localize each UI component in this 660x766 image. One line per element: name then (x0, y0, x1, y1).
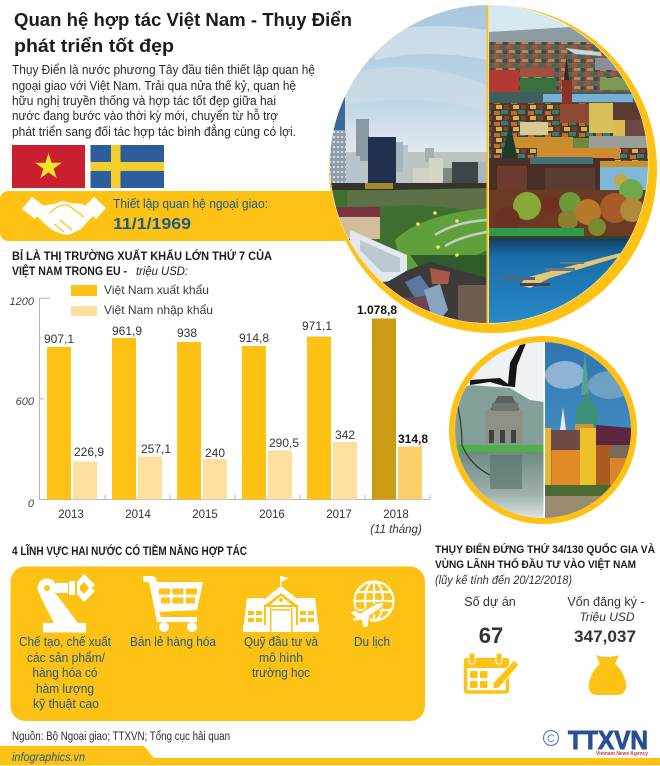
photo circle: Hanoi and Stockholm old town (449, 336, 637, 524)
bar values: 240 (205, 446, 225, 460)
sector labels: mô hình (259, 650, 303, 665)
export bars (47, 318, 396, 500)
chart heading: BỈ LÀ THỊ TRƯỜNG XUẤT KHẨU LỚN THỨ 7 CỦA (12, 250, 272, 263)
intro text: ngoại giao với Việt Nam. Trải qua nửa thế kỷ, quan hệ (12, 79, 296, 93)
sector labels: Du lịch (354, 634, 390, 649)
stat: registered capital (567, 595, 645, 695)
year labels: 2014 (125, 509, 151, 521)
bar values: 938 (177, 326, 197, 340)
year labels: 2015 (192, 509, 218, 521)
axis labels: 0 (28, 498, 35, 510)
stat: registered capital: Vốn đăng ký - (567, 595, 645, 609)
year labels: 2017 (326, 509, 352, 521)
sector labels: kỹ thuật cao (33, 696, 99, 711)
year labels: (11 tháng) (370, 524, 422, 536)
intro text: hữu nghị truyền thống và hợp tác tốt đẹp giữa hai (12, 94, 276, 108)
investment heading (435, 542, 655, 587)
stat: registered capital: Triệu USD (579, 610, 635, 624)
investment heading: VÙNG LÃNH THỔ ĐẦU TƯ VÀO VIỆT NAM (435, 558, 636, 571)
investment heading: (lũy kế tính đến 20/12/2018) (435, 575, 572, 587)
year labels: 2013 (58, 509, 84, 521)
banner text: Thiết lập quan hệ ngoại giao: (113, 197, 268, 211)
flag: Sweden (90, 145, 164, 188)
source: Nguồn: Bộ Ngoại giao; TTXVN; Tổng cục hải quan (12, 731, 230, 743)
intro text: phát triển sang đối tác hợp tác bình đẳng cùng có lợi. (12, 124, 296, 139)
chart legend: Việt Nam xuất khẩu (104, 283, 209, 297)
banner: diplomatic relations date (0, 191, 360, 241)
sector labels: các sản phẩm/ (27, 650, 105, 665)
sectors heading: 4 LĨNH VỰC HAI NƯỚC CÓ TIỀM NĂNG HỢP TÁC (12, 545, 247, 558)
year labels: 2016 (259, 509, 285, 521)
bar values: 226,9 (74, 445, 104, 459)
stat: number of projects (464, 595, 519, 692)
icon: money bag (589, 655, 626, 695)
stat: number of projects: Số dự án (464, 595, 516, 609)
stat: registered capital: 347,037 (574, 627, 636, 646)
bar values (44, 303, 428, 460)
chart heading: triệu USD: (136, 266, 188, 278)
icon: calendar (464, 653, 519, 692)
chart heading (12, 250, 272, 278)
bar values: 961,9 (112, 324, 142, 338)
footer strip (0, 746, 660, 766)
icon: shopping cart (143, 576, 203, 632)
city skyline and park side (331, 5, 486, 152)
sector labels: Quỹ đầu tư và (244, 634, 319, 649)
bar values: 257,1 (141, 442, 171, 456)
bar chart (10, 296, 430, 536)
intro text: Thụy Điển là nước phương Tây đầu tiên thiết lập quan hệ (12, 63, 315, 77)
icon: robot arm (38, 574, 95, 632)
axis labels: 1200 (10, 296, 35, 308)
year labels: 2018 (383, 509, 409, 521)
title (14, 9, 352, 56)
sector labels: Bán lẻ hàng hóa (130, 634, 217, 649)
axis labels (10, 296, 35, 510)
icon: handshake (22, 197, 106, 235)
stat: number of projects: 67 (479, 623, 503, 648)
chart legend (71, 283, 213, 317)
title: Quan hệ hợp tác Việt Nam - Thụy Điển (14, 9, 352, 30)
sector labels (19, 634, 390, 711)
bar values: 342 (335, 428, 355, 442)
sector labels: hàng hóa có (32, 665, 98, 680)
logo: TTXVN: Vietnam News Agency (596, 751, 649, 757)
sector labels: hàm lượng (36, 681, 94, 696)
logo: TTXVN (544, 725, 649, 757)
flag: Vietnam (12, 145, 85, 188)
logo: TTXVN: C (547, 733, 555, 745)
intro text (12, 63, 315, 139)
bar values: 1.078,8 (357, 303, 397, 317)
chart heading: VIỆT NAM TRONG EU - (12, 265, 127, 278)
bar values: 971,1 (302, 319, 332, 333)
chart legend: Việt Nam nhập khẩu (104, 303, 213, 317)
icon: globe and plane (348, 581, 394, 628)
panel: cooperation sectors (10, 566, 425, 721)
bar values: 314,8 (398, 432, 428, 446)
banner text (113, 197, 268, 233)
banner text: 11/1/1969 (113, 216, 191, 233)
logo: TTXVN: TTXVN (568, 725, 648, 755)
intro text: nước đang bước vào thời kỳ mới, chuyển từ hỗ trợ (12, 108, 278, 123)
photo circle: Vietnam and Stockholm (328, 0, 659, 333)
bar values: 914,8 (239, 331, 269, 345)
bar values: 290,5 (269, 436, 299, 450)
bar values: 907,1 (44, 332, 74, 346)
sector labels: trường học (252, 665, 310, 680)
Stockholm side (489, 5, 578, 32)
sector labels: Chế tạo, chế xuất (19, 634, 111, 649)
footer site name: infographics.vn (12, 750, 85, 764)
icon: school building (243, 576, 319, 632)
year labels (58, 509, 422, 536)
title: phát triển tốt đẹp (14, 35, 174, 56)
axis labels: 600 (16, 396, 35, 408)
import bars (73, 442, 422, 500)
